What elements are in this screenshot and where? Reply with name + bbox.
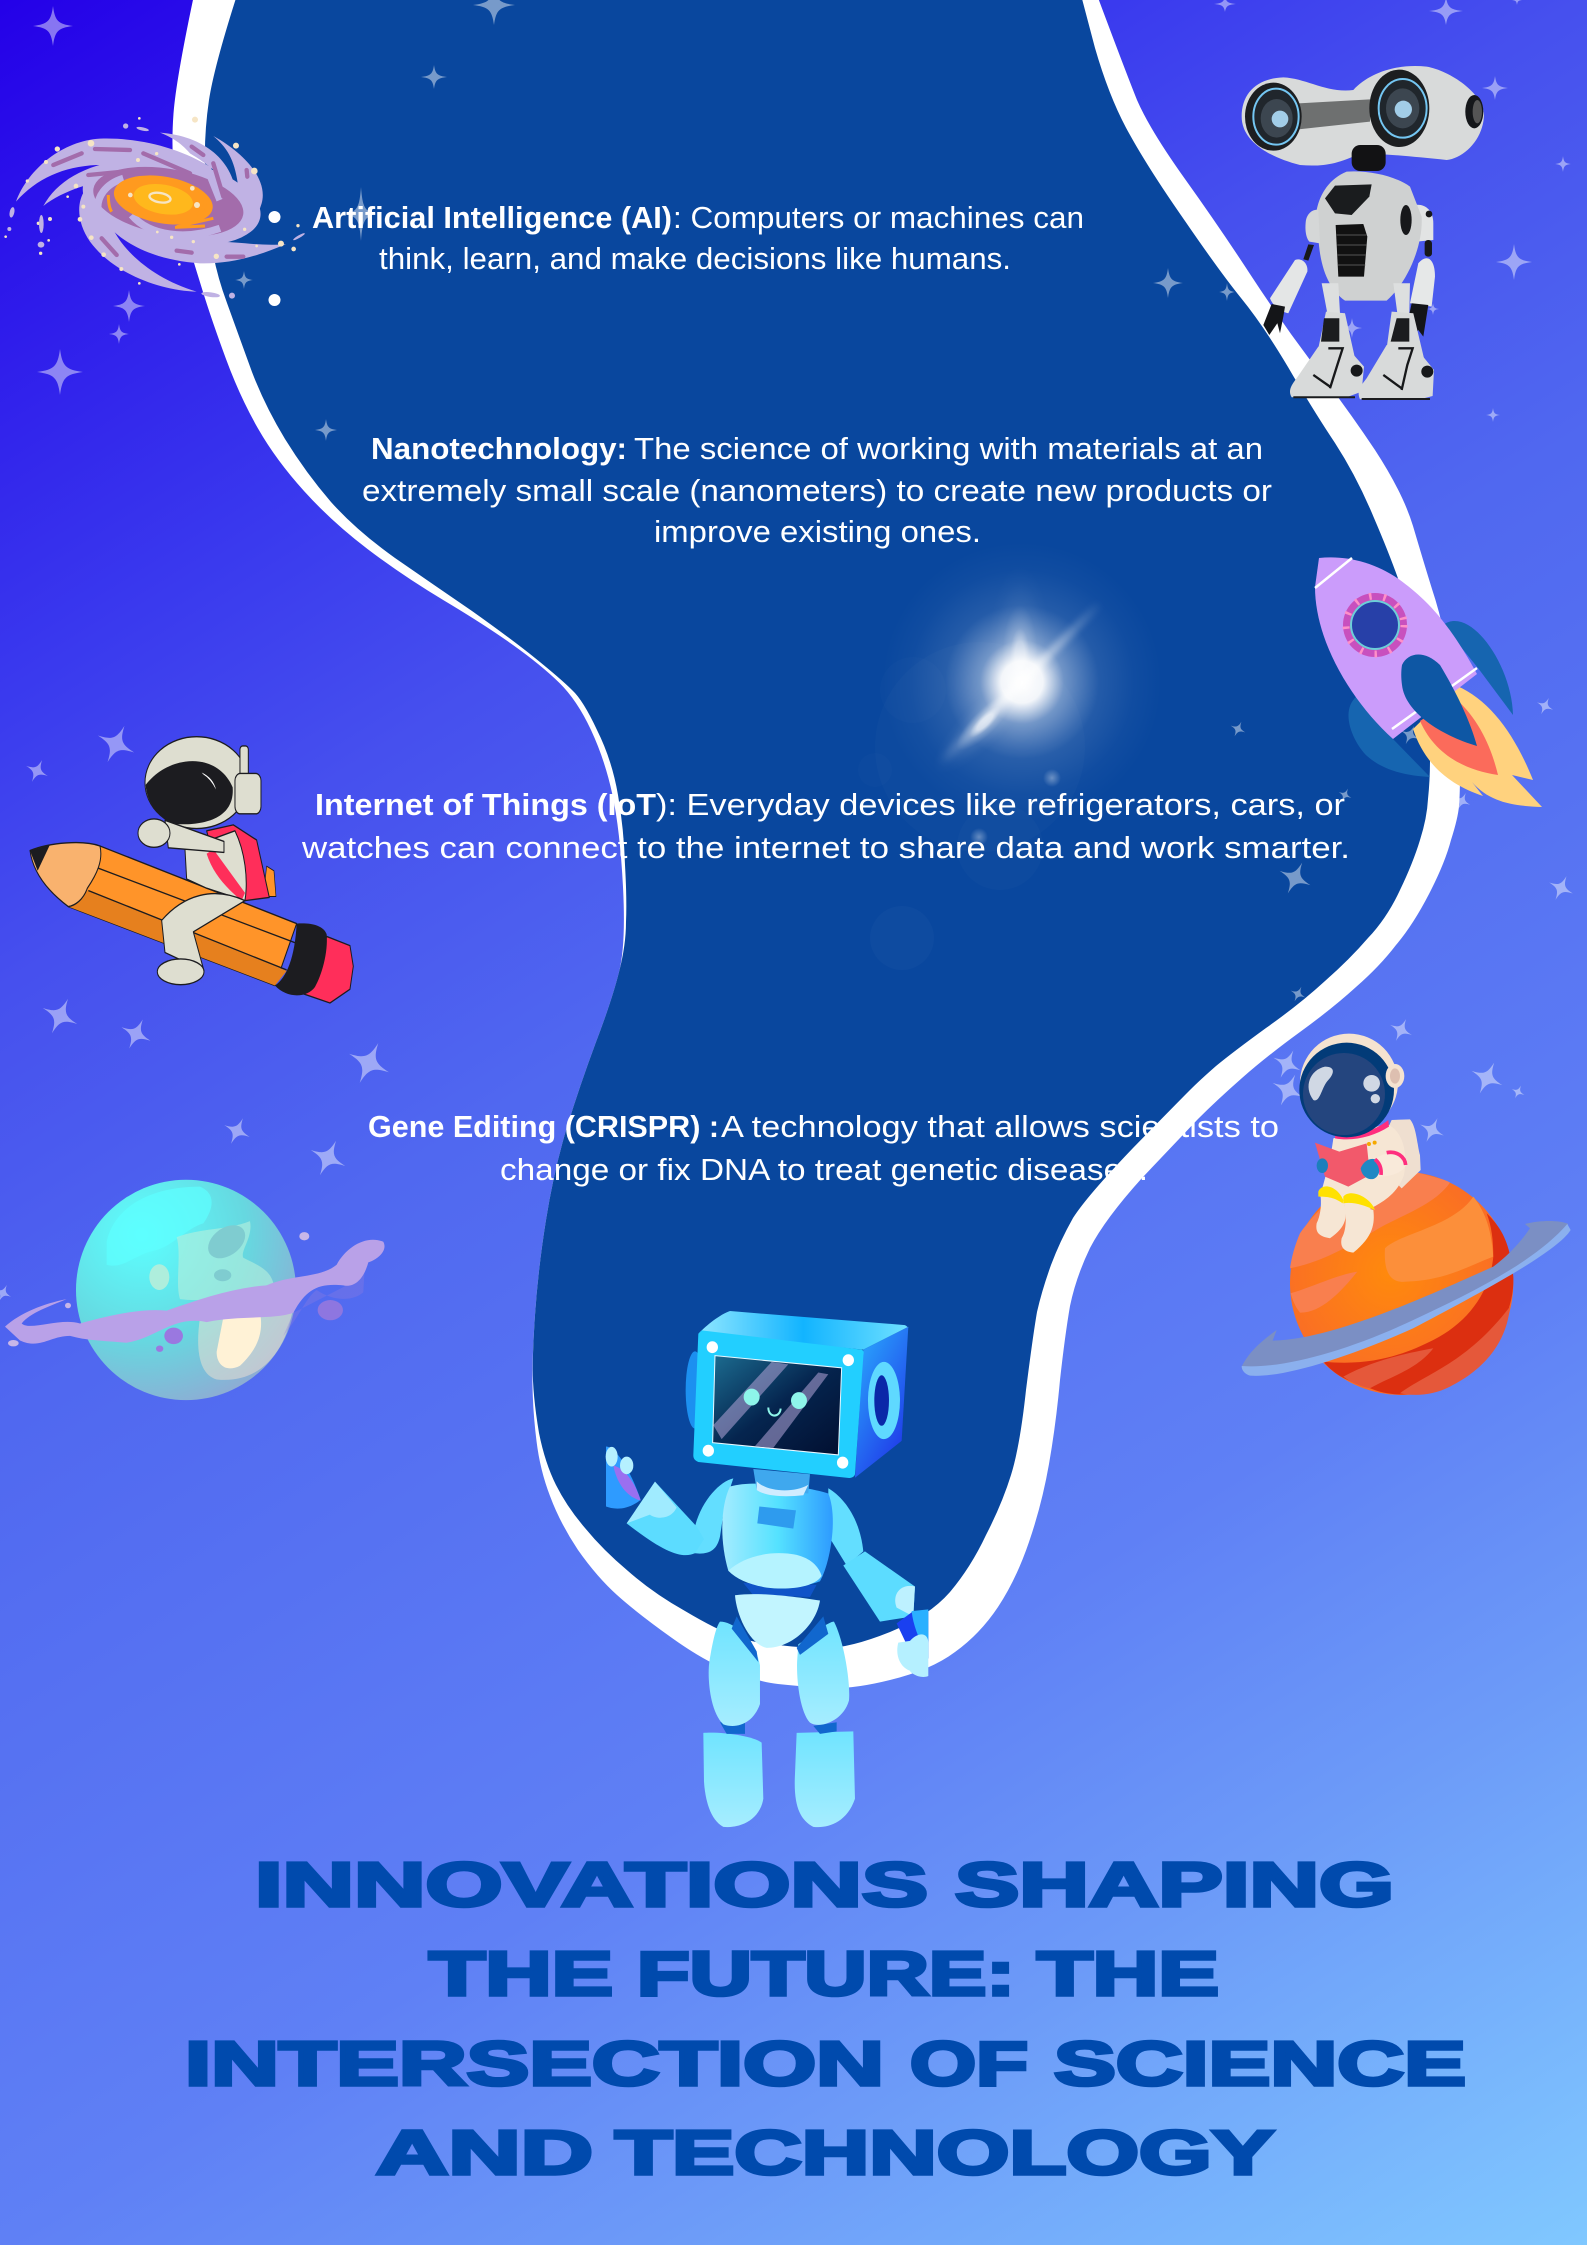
text block: artificial intelligence: think, learn, and make decisions like humans. <box>379 241 1011 276</box>
text block: artificial intelligence: : Computers or machines can <box>673 200 1084 235</box>
title: AND <box>376 2119 593 2188</box>
title: OF <box>910 2030 1028 2099</box>
title: INTERSECTION <box>185 2030 884 2099</box>
text block: nanotechnology: Nanotechnology: <box>371 431 627 466</box>
text block: gene editing: change or fix DNA to treat genetic diseases. <box>500 1152 1148 1187</box>
text block: gene editing <box>368 1109 1279 1187</box>
title: TECHNOLOGY <box>615 2119 1274 2188</box>
text block: nanotechnology: improve existing ones. <box>654 514 981 549</box>
title: FUTURE: <box>637 1940 1015 2009</box>
dark blue central blob <box>205 0 1430 1648</box>
text block: nanotechnology: The science of working with materials at an <box>634 431 1263 466</box>
background stars <box>0 0 1578 1305</box>
icon: blue robot <box>606 1311 928 1827</box>
icon: astronaut riding pencil <box>30 737 353 1003</box>
text block: artificial intelligence <box>312 200 1084 276</box>
lens flare <box>858 542 1162 970</box>
icon: rocket <box>1315 557 1542 807</box>
text block: internet of things: ): Everyday devices like refrigerators, cars, or <box>656 787 1345 822</box>
title: INNOVATIONS <box>255 1851 928 1920</box>
title: THE <box>1037 1940 1219 2009</box>
icon: spiral galaxy <box>4 117 305 299</box>
text block: internet of things: watches can connect to the internet to share data and work smarter. <box>301 830 1350 865</box>
text block: gene editing: A technology that allows scientists to <box>721 1109 1279 1144</box>
icon: teal ringed planet <box>5 1180 384 1400</box>
icon: silver robot <box>1242 66 1484 399</box>
text block: internet of things <box>301 787 1350 865</box>
text block: nanotechnology: extremely small scale (nanometers) to create new products or <box>362 473 1272 508</box>
title: SHAPING <box>955 1851 1394 1920</box>
title: SCIENCE <box>1054 2030 1466 2099</box>
text block: nanotechnology <box>362 431 1272 549</box>
icon: astronaut reading on orange planet <box>1242 1034 1571 1395</box>
white outline of central blob <box>172 0 1460 1688</box>
title <box>185 1851 1466 2188</box>
bullet dots <box>268 211 280 306</box>
text block: gene editing: Gene Editing (CRISPR) : <box>368 1109 719 1144</box>
text block: artificial intelligence: Artificial Intelligence (AI) <box>312 200 672 235</box>
text block: internet of things: Internet of Things (IoT <box>315 787 656 822</box>
title: THE <box>429 1940 613 2009</box>
